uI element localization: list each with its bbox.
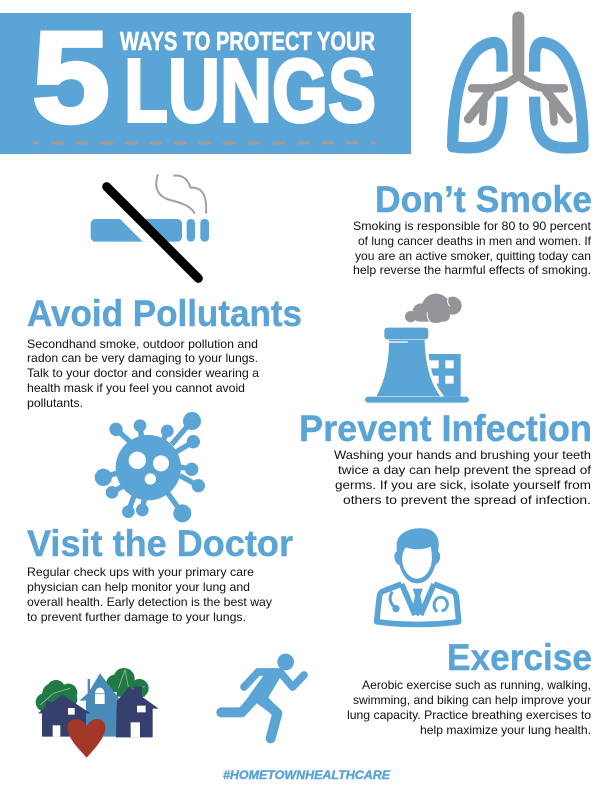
- heading: exercise: Exercise: [447, 637, 592, 678]
- text: avoid pollutants: radon can be very damaging to your lungs.: [27, 351, 258, 365]
- text: visit the doctor: Regular check ups with your primary care: [27, 565, 254, 579]
- icon: lungs: [453, 17, 583, 148]
- text: avoid pollutants: health mask if you feel you cannot avoid: [27, 381, 245, 395]
- text: exercise: help maximize your lung health.: [420, 723, 591, 737]
- title banner: [0, 4, 411, 154]
- text: avoid pollutants: Talk to your doctor and consider wearing a: [27, 366, 259, 380]
- icon: homes and heart: [36, 668, 159, 758]
- text: exercise: Aerobic exercise such as running, walking,: [362, 678, 591, 692]
- text: prevent infection: twice a day can help prevent the spread of: [338, 463, 592, 477]
- hashtag: #HOMETOWNHEALTHCARE: [223, 768, 391, 782]
- text: prevent infection: [334, 448, 592, 507]
- text: visit the doctor: to prevent further damage to your lungs.: [27, 610, 246, 624]
- icon: virus: [95, 412, 205, 522]
- text: prevent infection: germs. If you are sick, isolate yourself from: [335, 478, 591, 492]
- text: avoid pollutants: [27, 337, 259, 410]
- icon: factory: [365, 294, 469, 403]
- text: visit the doctor: overall health. Early detection is the best way: [27, 595, 272, 609]
- title: lungs: LUNGS: [124, 42, 376, 142]
- text: exercise: lung capacity. Practice breathing exercises to: [347, 708, 591, 722]
- text: avoid pollutants: Secondhand smoke, outdoor pollution and: [27, 337, 258, 351]
- icon: runner: [221, 654, 304, 738]
- heading: don't smoke: Don’t Smoke: [375, 179, 592, 220]
- text: visit the doctor: physician can help monitor your lung and: [27, 580, 250, 594]
- text: prevent infection: Washing your hands and brushing your teeth: [334, 448, 591, 462]
- heading: avoid pollutants: Avoid Pollutants: [27, 293, 302, 334]
- heading: prevent infection: Prevent Infection: [299, 408, 592, 449]
- text: avoid pollutants: pollutants.: [27, 396, 83, 410]
- text: exercise: [347, 678, 591, 737]
- title: ways to protect your: WAYS TO PROTECT YOUR: [120, 26, 375, 56]
- text: prevent infection: others to prevent the spread of infection.: [343, 493, 591, 507]
- text: don't smoke: of lung cancer deaths in men and women. If: [358, 234, 592, 248]
- text: don't smoke: Smoking is responsible for 80 to 90 percent: [353, 219, 592, 233]
- title: numeral 5: 5: [32, 4, 110, 150]
- text: don't smoke: [353, 219, 592, 277]
- icon: doctor: [377, 528, 459, 624]
- text: exercise: swimming, and biking can help improve your: [353, 693, 591, 707]
- text: don't smoke: you are an active smoker, quitting today can: [355, 249, 591, 263]
- heading: visit the doctor: Visit the Doctor: [27, 523, 293, 564]
- text: visit the doctor: [27, 565, 272, 624]
- text: don't smoke: help reverse the harmful effects of smoking.: [353, 263, 591, 277]
- icon: no smoking: [91, 174, 209, 278]
